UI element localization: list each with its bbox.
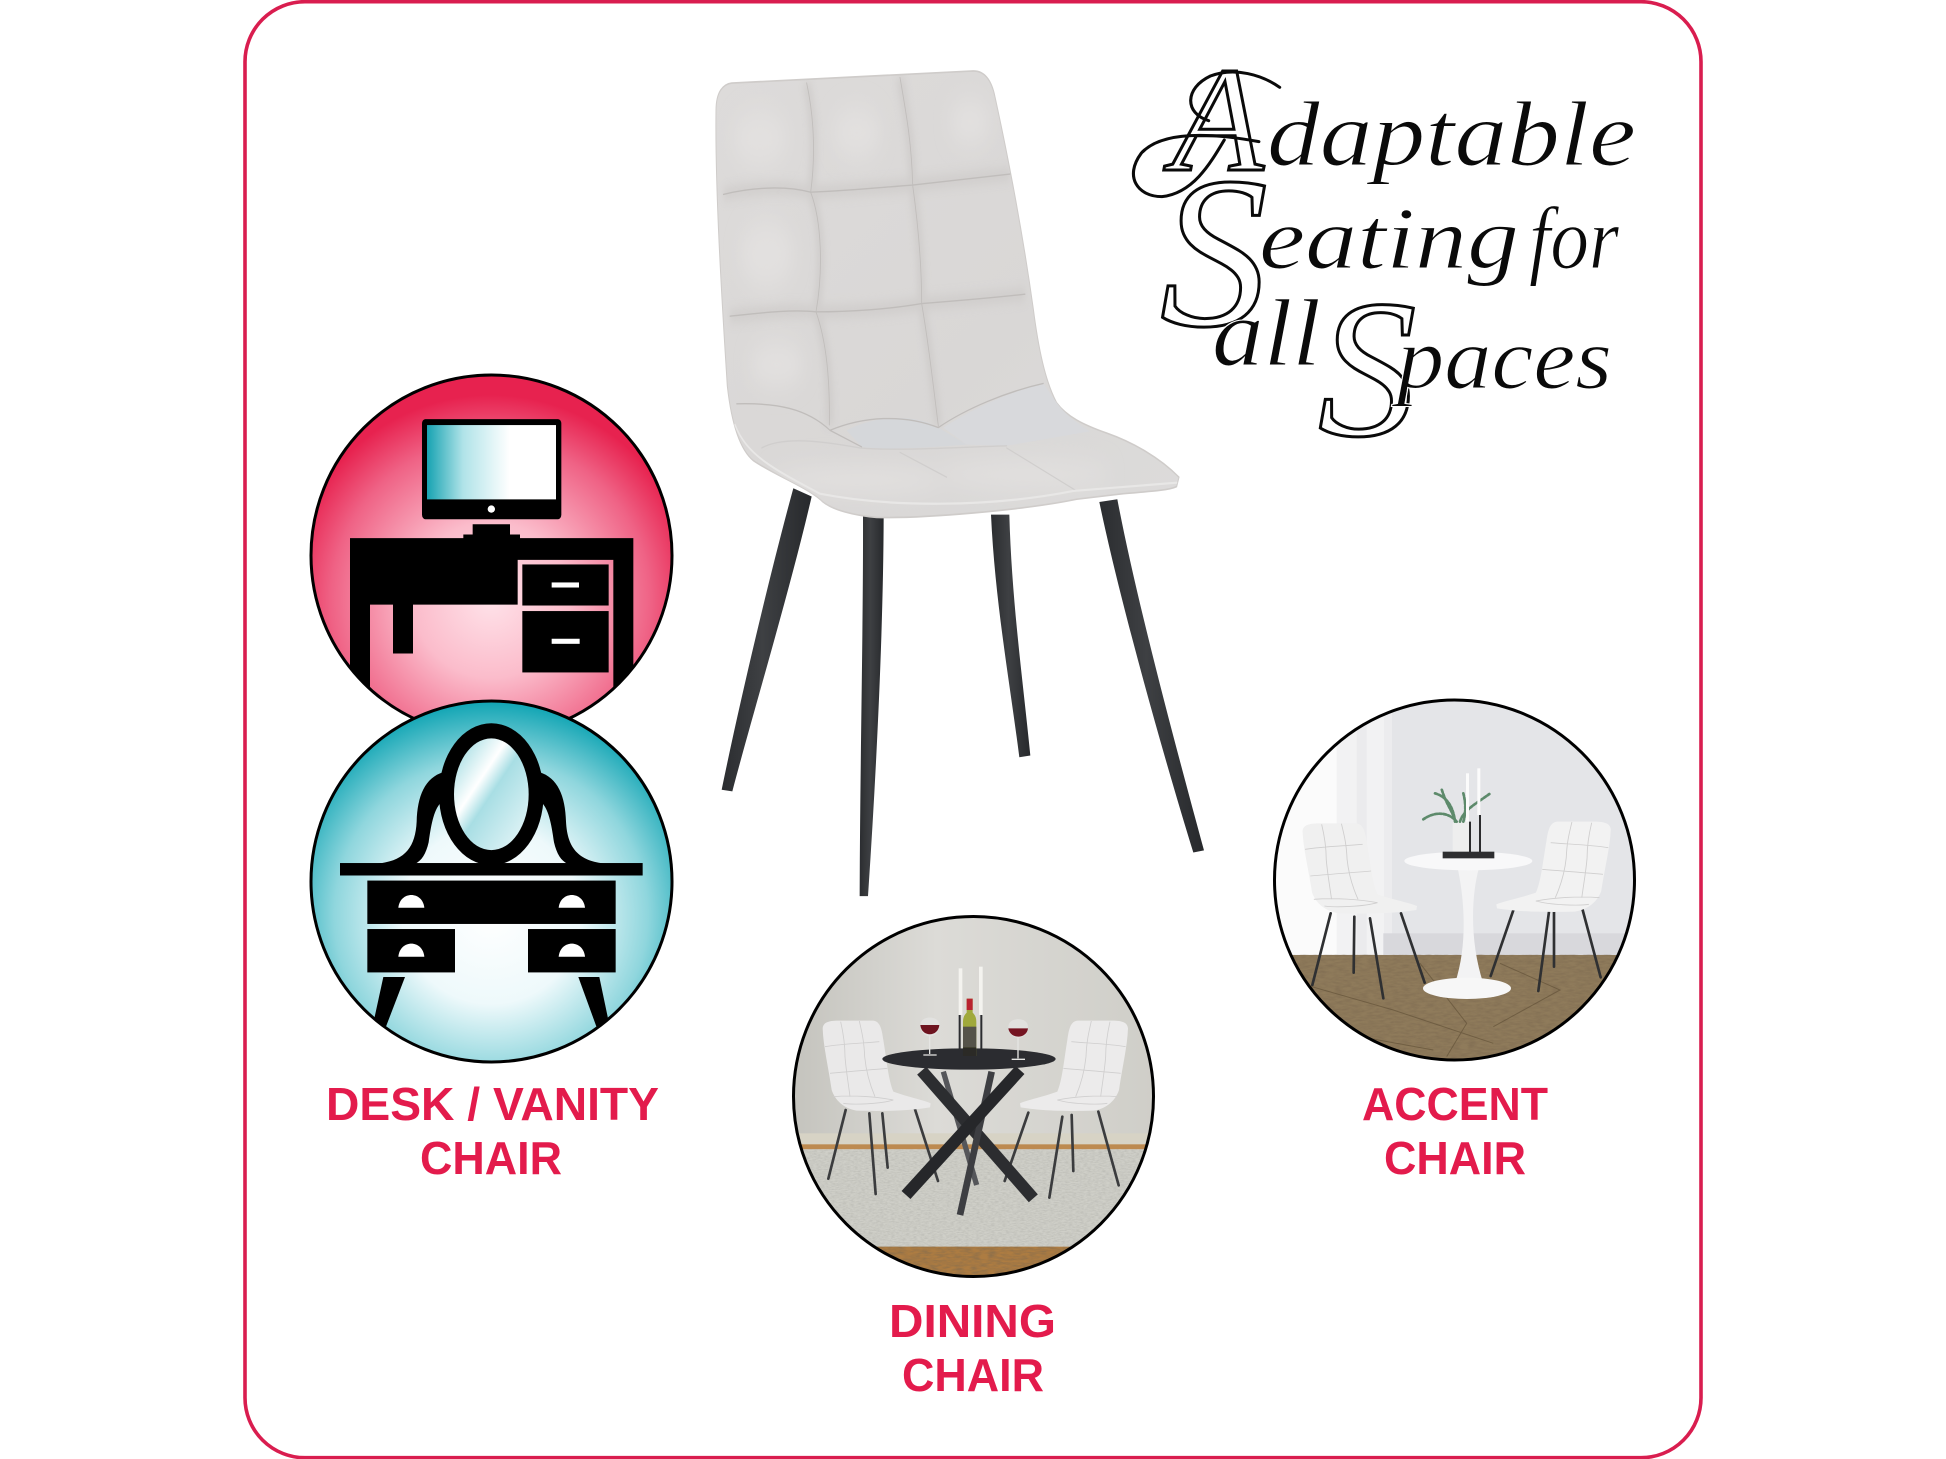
vanity drawer pulls bbox=[398, 895, 585, 957]
accent wood floor bbox=[1292, 954, 1616, 1058]
accent table base bbox=[1423, 978, 1511, 999]
chair legs bbox=[722, 488, 1204, 896]
title flourish loops bbox=[1133, 72, 1280, 197]
dining circle outline bbox=[794, 916, 1154, 1276]
label line: ACCENT: ACCENT bbox=[1362, 1078, 1548, 1130]
product image: tufted grey chair bbox=[716, 71, 1204, 896]
title word: all: all bbox=[1212, 280, 1321, 386]
accent baseboard bbox=[1383, 933, 1640, 955]
label line: CHAIR: CHAIR bbox=[1384, 1132, 1526, 1184]
icon circle: vanity bbox=[311, 701, 672, 1062]
rounded border frame bbox=[245, 2, 1701, 1458]
dining table top bbox=[882, 1048, 1056, 1070]
dining wall bbox=[790, 913, 1157, 1134]
accent table pedestal bbox=[1456, 870, 1482, 978]
vanity circle background bbox=[311, 701, 672, 1062]
dining baseboard bbox=[790, 1133, 1157, 1145]
label: desk / vanity chair bbox=[326, 1078, 659, 1184]
upholstery seams bbox=[723, 78, 1177, 504]
accent plant bbox=[1423, 789, 1489, 822]
dining table legs bbox=[906, 1070, 1033, 1215]
accent circle outline bbox=[1274, 700, 1634, 1060]
desk circle outline bbox=[311, 375, 672, 736]
desk circle background bbox=[311, 375, 672, 736]
title: Adaptable Seating for all Spaces bbox=[1133, 37, 1636, 478]
wine glasses bbox=[920, 1017, 1028, 1059]
label: accent chair bbox=[1362, 1078, 1548, 1184]
title word: daptable: daptable bbox=[1267, 83, 1636, 185]
vanity mirror bbox=[439, 723, 544, 865]
accent book bbox=[1443, 852, 1494, 858]
right accent chair bbox=[1491, 822, 1611, 991]
accent curtain bbox=[1276, 716, 1384, 955]
wine bottle bbox=[963, 999, 976, 1056]
accent table top bbox=[1404, 852, 1532, 870]
right dining chair bbox=[1005, 1021, 1128, 1198]
dining wood strip bbox=[790, 1144, 1157, 1149]
desk and monitor icon bbox=[350, 419, 633, 711]
vanity table icon bbox=[340, 723, 643, 1029]
vanity scrolls bbox=[373, 772, 609, 864]
desk drawers bbox=[522, 564, 609, 672]
title word: eating: eating bbox=[1259, 191, 1519, 288]
monitor bbox=[422, 419, 561, 519]
title word: S of Spaces: S bbox=[1318, 259, 1416, 478]
accent vase bbox=[1453, 822, 1469, 852]
seat center shading bbox=[847, 383, 1090, 448]
title word: A: A bbox=[1163, 37, 1265, 203]
label line: DINING: DINING bbox=[889, 1295, 1056, 1347]
cushion highlights bbox=[782, 476, 815, 495]
left dining chair bbox=[823, 1021, 938, 1194]
accent candles bbox=[1466, 768, 1480, 855]
chair body bbox=[716, 71, 1179, 518]
dining floor bbox=[876, 1246, 1070, 1275]
vanity circle outline bbox=[311, 701, 672, 1062]
vanity drawers bbox=[367, 881, 616, 972]
title word: for: for bbox=[1529, 191, 1620, 288]
chair cushion shading bbox=[726, 83, 1020, 495]
candles bbox=[959, 967, 983, 1050]
vanity table top bbox=[340, 863, 643, 875]
desk silhouette bbox=[350, 524, 634, 687]
photo circle: dining room bbox=[790, 913, 1157, 1280]
label line: CHAIR: CHAIR bbox=[420, 1132, 562, 1184]
left accent chair bbox=[1303, 823, 1425, 998]
photo circle: accent setting bbox=[1270, 697, 1640, 1062]
accent wall bbox=[1392, 702, 1633, 934]
title word: paces: paces bbox=[1391, 311, 1612, 408]
vanity legs bbox=[374, 977, 608, 1029]
seam shadows bbox=[723, 78, 1025, 426]
title word: S: S bbox=[1160, 133, 1268, 372]
label: dining chair bbox=[889, 1295, 1056, 1401]
dining rug bbox=[790, 1149, 1157, 1247]
label line: CHAIR: CHAIR bbox=[902, 1349, 1044, 1401]
label line: DESK / VANITY: DESK / VANITY bbox=[326, 1078, 659, 1130]
icon circle: desk bbox=[311, 375, 672, 736]
